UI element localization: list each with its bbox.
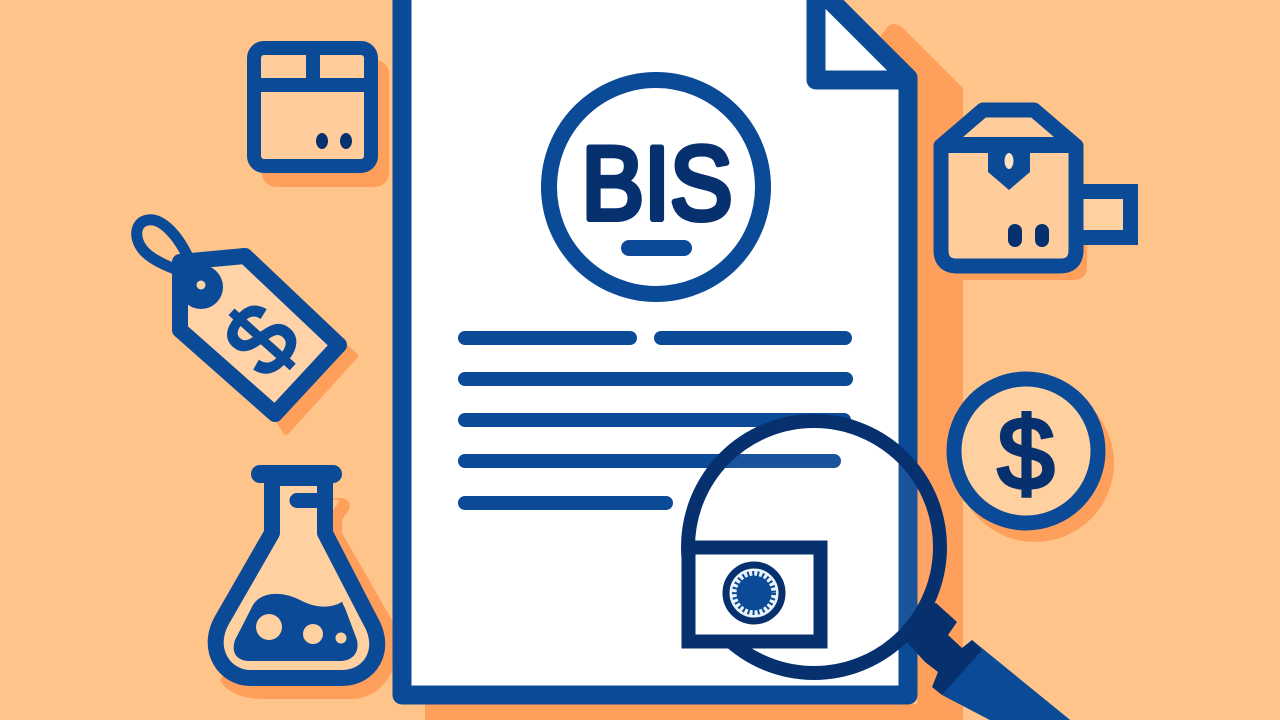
lens: [688, 421, 940, 673]
icon: price tag: $: [202, 282, 320, 396]
icon: price tag: [137, 220, 355, 432]
fold corner: [810, 0, 908, 80]
icon: dollar coin: [954, 379, 1114, 542]
text lines on document: [465, 338, 846, 503]
icon: magnifying glass: [688, 421, 1080, 720]
logo: BIS seal: [549, 80, 763, 294]
panel: document page: [402, 0, 908, 695]
document shadow: [425, 24, 963, 720]
magnifier handle: [942, 640, 1080, 720]
logo: BIS seal: BIS: [582, 126, 732, 242]
icon: storage box: [254, 48, 389, 187]
flag emblem: [688, 548, 820, 642]
magnifier neck: [905, 603, 982, 695]
icon: packaged parcel: [941, 110, 1130, 280]
icon: dollar coin: $: [998, 397, 1054, 511]
icon: laboratory flask: [216, 465, 397, 699]
